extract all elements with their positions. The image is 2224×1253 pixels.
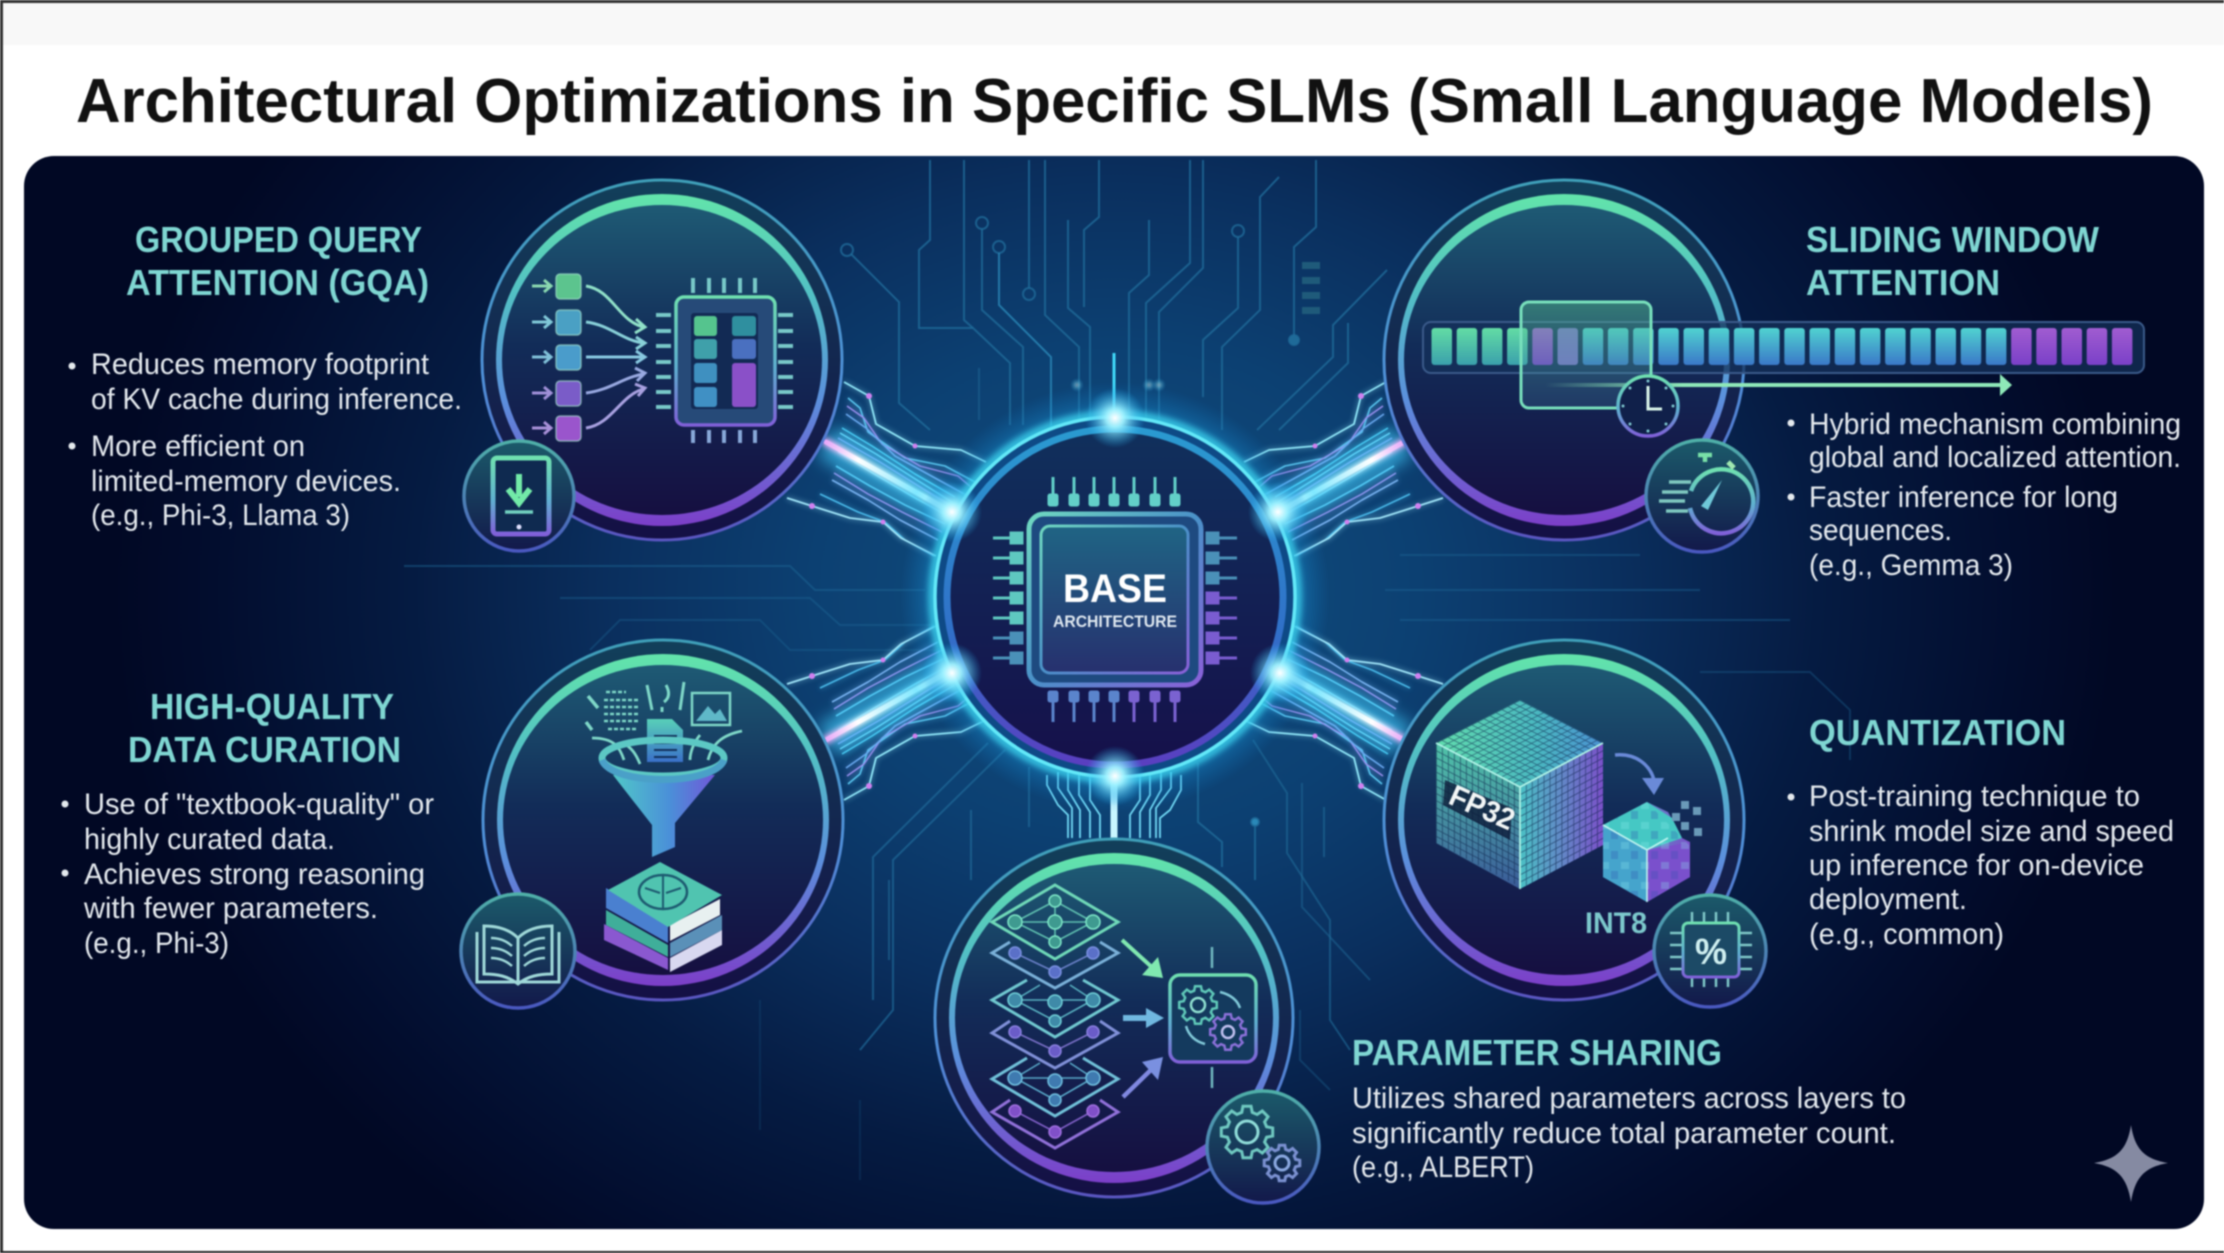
heading: data curation — [128, 686, 401, 770]
chart: token sequence bar — [1423, 322, 2144, 373]
text block: sliding window bullets: global and localized attention. — [1809, 441, 2181, 474]
text block: GQA bullets: (e.g., Phi-3, Llama 3) — [91, 499, 350, 532]
text block: parameter sharing: significantly reduce total parameter count. — [1352, 1117, 1896, 1150]
parameter ring — [935, 839, 1293, 1197]
icon: shared network layers — [992, 885, 1118, 1148]
text block: data curation bullets: (e.g., Phi-3) — [84, 927, 229, 960]
panel: GQA circle — [482, 180, 842, 540]
chip pins — [993, 477, 1237, 722]
heading: sliding window: SLIDING WINDOW — [1806, 219, 2099, 260]
heading: data curation: DATA CURATION — [128, 729, 401, 770]
heading: GQA — [126, 219, 429, 303]
energy connector: lower left — [787, 626, 986, 800]
icon badge: percent chip — [1654, 895, 1766, 1007]
panel: quantization circle — [1384, 640, 1744, 1000]
icon: INT8 cube — [1603, 800, 1702, 902]
heading: sliding window — [1806, 219, 2099, 303]
GQA ring — [482, 180, 842, 540]
hub label: ARCHITECTURE: ARCHITECTURE — [1053, 612, 1177, 631]
energy connector: down to parameter sharing — [1047, 772, 1181, 838]
text block: quantization bullet: (e.g., common) — [1809, 918, 2004, 951]
icon: clock — [1618, 376, 1678, 436]
energy connector: lower right — [1244, 626, 1443, 800]
panel: sliding window circle — [1384, 180, 1744, 540]
panel: base architecture hub — [900, 382, 1330, 812]
text block: quantization bullet: deployment. — [1809, 883, 1967, 916]
arrow: window slide direction — [1545, 374, 2012, 396]
heading: quantization: QUANTIZATION — [1809, 712, 2066, 753]
heading: sliding window: ATTENTION — [1806, 262, 2000, 303]
text block: quantization bullet: up inference for on-device — [1809, 849, 2144, 882]
text block: data curation bullets: with fewer parameters. — [83, 892, 378, 925]
text block: GQA bullets: Reduces memory footprint — [91, 348, 429, 381]
text block: parameter sharing — [1352, 1082, 1906, 1184]
text block: GQA bullets: limited-memory devices. — [91, 465, 401, 498]
hub rings — [935, 417, 1295, 777]
icon badge: open book — [461, 894, 575, 1008]
heading: parameter sharing: PARAMETER SHARING — [1352, 1032, 1722, 1073]
heading: GQA: ATTENTION (GQA) — [126, 262, 429, 303]
text block: data curation bullets: Use of "textbook-quality" or — [84, 788, 434, 821]
icon: FP32 cube: FP32 — [1444, 779, 1520, 837]
arrows: layers to shared block — [1122, 940, 1164, 1097]
heading: GQA: GROUPED QUERY — [135, 219, 422, 260]
text block: parameter sharing: Utilizes shared parameters across layers to — [1352, 1082, 1906, 1115]
sliding window frame — [1521, 302, 1651, 408]
text block: GQA bullets: More efficient on — [91, 430, 305, 463]
energy connector: upper left — [787, 382, 986, 556]
text block: data curation bullets — [62, 788, 434, 960]
panel: data curation circle — [483, 640, 843, 1000]
text block: sliding window bullets: Faster inference for long — [1809, 481, 2118, 514]
icon: scattered data — [586, 682, 742, 764]
text block: quantization bullet: shrink model size and speed — [1809, 815, 2174, 848]
text block: data curation bullets: highly curated data. — [84, 823, 335, 856]
icon: input query squares — [532, 274, 581, 441]
icon: FP32 cube — [1436, 700, 1603, 889]
arrow: quantize — [1615, 755, 1664, 795]
ring glow nodes — [922, 388, 1310, 806]
icon: stacked books — [604, 862, 722, 972]
icon: document — [647, 719, 683, 762]
text block: quantization bullet: Post-training technique to — [1809, 780, 2140, 813]
energy connector: upper right — [1244, 382, 1443, 556]
icon: grouped memory chip — [656, 278, 793, 443]
icon badge: stopwatch — [1646, 440, 1758, 552]
text block: GQA bullets: of KV cache during inference. — [91, 383, 462, 416]
icon: funnel — [602, 740, 724, 857]
energy connector: up from base — [1070, 353, 1166, 420]
icon badge: tablet download — [464, 441, 574, 551]
hub halo — [900, 382, 1330, 812]
title: Architectural Optimizations in Specific SLMs (Small Language Models) — [76, 67, 2153, 136]
icon badge: percent chip: % — [1695, 931, 1727, 972]
icon badge: gears — [1207, 1091, 1319, 1203]
text block: sliding window bullets: (e.g., Gemma 3) — [1809, 549, 2013, 582]
data ring — [483, 640, 843, 1000]
decorative dashes near top — [1302, 262, 1320, 314]
text block: sliding window bullets: sequences. — [1809, 514, 1952, 547]
text block: sliding window bullets: Hybrid mechanism combining — [1809, 408, 2181, 441]
text block: parameter sharing: (e.g., ALBERT) — [1352, 1151, 1534, 1184]
hub label: BASE: BASE — [1063, 567, 1167, 611]
icon: shared gears box — [1170, 947, 1256, 1088]
chip body — [1029, 514, 1201, 685]
label: INT8: INT8 — [1585, 907, 1647, 940]
icon: sparkle watermark — [2094, 1125, 2168, 1202]
text block: quantization bullet — [1788, 780, 2174, 951]
circuit traces — [404, 160, 1850, 1180]
text block: data curation bullets: Achieves strong reasoning — [84, 858, 425, 891]
text block: GQA bullets — [68, 348, 462, 532]
icon: grouping arrows — [586, 286, 645, 428]
text block: sliding window bullets — [1788, 408, 2181, 582]
heading: data curation: HIGH-QUALITY — [150, 686, 394, 727]
quantization ring — [1384, 640, 1744, 1000]
panel: parameter sharing circle — [935, 839, 1293, 1197]
